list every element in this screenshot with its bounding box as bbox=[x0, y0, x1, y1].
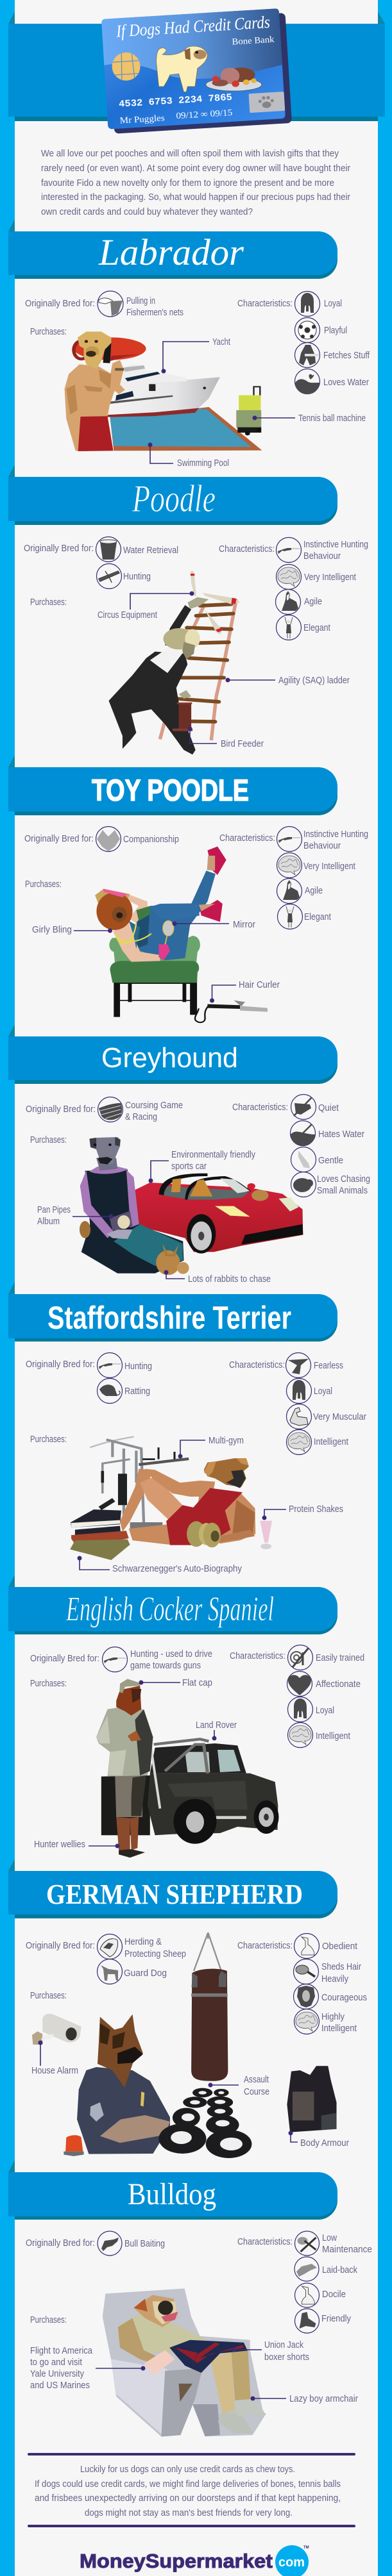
characteristics: Instinctive Hunting bbox=[303, 539, 368, 550]
characteristics bbox=[219, 827, 368, 929]
characteristics: Loyal bbox=[324, 298, 342, 309]
banner: german shepherd bbox=[8, 1859, 337, 1918]
originally bred for: Water Retrieval bbox=[123, 545, 178, 556]
characteristics: Characteristics: bbox=[219, 544, 275, 554]
characteristics: Intelligent bbox=[321, 2023, 357, 2034]
curly poodle head bbox=[95, 889, 133, 930]
tennis ball machine bbox=[236, 386, 261, 435]
banner: toy poodle bbox=[8, 755, 337, 815]
characteristics: Characteristics: bbox=[230, 1650, 285, 1661]
callout: flat cap bbox=[139, 1677, 212, 1688]
callout: flight to america: Flight to America bbox=[30, 2345, 93, 2356]
characteristics: Agile bbox=[304, 596, 322, 607]
callout: circus equipment bbox=[98, 591, 194, 620]
originally bred for: Originally Bred for: bbox=[26, 1104, 96, 1115]
banner: poodle: Poodle bbox=[132, 478, 216, 520]
characteristics: Characteristics: bbox=[229, 1359, 285, 1370]
originally bred for: Originally Bred for: bbox=[24, 833, 94, 844]
section: bulldog bbox=[8, 2160, 372, 2437]
characteristics: Friendly bbox=[321, 2313, 351, 2324]
section: poodle bbox=[8, 465, 368, 754]
green armchair bbox=[109, 936, 200, 1017]
callout: assault course bbox=[208, 2074, 269, 2097]
originally bred for bbox=[25, 291, 183, 318]
originally bred for bbox=[26, 1934, 186, 1984]
banner: bulldog bbox=[8, 2160, 337, 2220]
callout: autobiography: Schwarzenegger's Auto-Biography bbox=[112, 1563, 242, 1574]
banner: staffordshire terrier: Staffordshire Terrier bbox=[47, 1300, 291, 1336]
callout: lazy boy armchair bbox=[250, 2393, 358, 2404]
characteristics: Intelligent bbox=[314, 1436, 349, 1447]
bulldog body bbox=[117, 2314, 266, 2434]
lazy boy armchair bbox=[103, 2288, 266, 2437]
tyres bbox=[158, 2088, 251, 2158]
callout: bird feeder bbox=[187, 727, 264, 749]
callout: assault course: Course bbox=[244, 2086, 269, 2097]
logo: MoneySupermarket.com: TM bbox=[303, 2546, 309, 2550]
characteristics: Quiet bbox=[318, 1102, 339, 1113]
protein shake bbox=[260, 1521, 272, 1549]
callout: body armour bbox=[289, 2131, 349, 2148]
characteristics: Playful bbox=[324, 325, 347, 336]
characteristics: Fetches Stuff bbox=[323, 350, 370, 361]
heels bbox=[199, 847, 226, 922]
characteristics: Characteristics: bbox=[237, 1940, 293, 1951]
hand mirror bbox=[158, 920, 174, 960]
section: labrador bbox=[8, 219, 370, 469]
banner: english cocker spaniel: English Cocker Spaniel bbox=[65, 1590, 274, 1628]
chip bbox=[111, 51, 141, 81]
purchases label: Purchases: bbox=[30, 1678, 67, 1689]
callout: rabbits bbox=[164, 1270, 271, 1284]
callout: pan pipes album: Album bbox=[37, 1216, 60, 1227]
logo: MoneySupermarket.com: MoneySupermarket bbox=[80, 2550, 273, 2572]
jeans and legs bbox=[133, 870, 216, 960]
characteristics: Loves Water bbox=[323, 377, 369, 388]
intro text block: We all love our pet pooches and will often spoil them with lavish gifts that they bbox=[41, 148, 339, 159]
intro text block: interested in the packaging. So, what would happen if our precious pups had their bbox=[41, 192, 350, 203]
banner: german shepherd: GERMAN SHEPHERD bbox=[46, 1879, 303, 1910]
section: greyhound bbox=[8, 1024, 370, 1284]
characteristics bbox=[237, 1933, 367, 2034]
callout: tennis ball machine: Tennis ball machine bbox=[298, 413, 366, 424]
originally bred for bbox=[24, 827, 179, 851]
illustration: poodle in tuxedo with ladder, pins, feeder bbox=[109, 570, 240, 754]
characteristics: Small Animals bbox=[317, 1185, 368, 1196]
originally bred for bbox=[24, 537, 178, 588]
originally bred for: Pulling in bbox=[126, 295, 155, 306]
originally bred for: Originally Bred for: bbox=[26, 1359, 95, 1370]
originally bred for bbox=[26, 2231, 165, 2256]
callout: tennis ball machine bbox=[253, 413, 366, 424]
originally bred for: Bull Baiting bbox=[124, 2238, 165, 2249]
banner: staffordshire terrier bbox=[8, 1282, 337, 1342]
shotgun bbox=[149, 1733, 160, 1809]
card dates: 09/12 ∞ 09/15 bbox=[176, 108, 233, 121]
intro text block: own credit cards and could buy whatever they wanted? bbox=[41, 206, 253, 217]
purchases label: Purchases: bbox=[25, 879, 62, 890]
pug and roast dinner bbox=[157, 46, 262, 92]
callout: hunter wellies: Hunter wellies bbox=[34, 1839, 85, 1850]
callout: girly bling: Girly Bling bbox=[32, 924, 72, 935]
callout: swimming pool: Swimming Pool bbox=[177, 458, 229, 469]
characteristics: Behaviour bbox=[303, 840, 341, 851]
purchases label: Purchases: bbox=[30, 1434, 67, 1445]
characteristics: Gentle bbox=[318, 1155, 343, 1166]
callout: hair curler bbox=[210, 979, 280, 1002]
callout: sports car: Environmentally friendly bbox=[171, 1149, 255, 1160]
callout: union jack boxers: Union Jack bbox=[264, 2339, 303, 2350]
purchases label: Purchases: bbox=[30, 326, 67, 337]
multi-gym bbox=[90, 1437, 189, 1525]
callout: mirror: Mirror bbox=[233, 919, 255, 930]
characteristics: Elegant bbox=[303, 622, 331, 633]
land rover bbox=[101, 1739, 279, 1844]
characteristics: Behaviour bbox=[303, 551, 341, 561]
characteristics: Loyal bbox=[316, 1705, 334, 1716]
characteristics: Affectionate bbox=[316, 1679, 361, 1690]
characteristics: Very Intelligent bbox=[304, 572, 357, 583]
callout: flight to america bbox=[30, 2345, 145, 2391]
intro text block: favourite Fido a new novelty only for them to ignore the present and be more bbox=[41, 178, 334, 188]
callout: union jack boxers bbox=[231, 2339, 309, 2363]
illustration: lifeguard labrador, yacht, pool, tennis machine bbox=[65, 331, 262, 451]
callout: flight to america: to go and visit bbox=[30, 2357, 83, 2368]
illustration: bulldog in recliner bbox=[103, 2288, 266, 2437]
characteristics bbox=[237, 291, 370, 394]
characteristics bbox=[232, 1095, 370, 1197]
banner: greyhound bbox=[8, 1024, 337, 1084]
closing text block: dogs might not stay as man's best friends for very long. bbox=[85, 2507, 293, 2518]
banner: poodle bbox=[8, 465, 337, 525]
characteristics: Obedient bbox=[322, 1941, 358, 1952]
characteristics: Loyal bbox=[314, 1386, 332, 1397]
banner: toy poodle: TOY POODLE bbox=[92, 773, 249, 807]
section: german shepherd bbox=[8, 1859, 367, 2158]
tuxedo body bbox=[109, 597, 209, 754]
agility ladder bbox=[160, 599, 236, 740]
originally bred for: Fishermen's nets bbox=[126, 307, 183, 318]
banner: bulldog: Bulldog bbox=[128, 2177, 216, 2211]
intro text block bbox=[41, 148, 350, 217]
siren bbox=[64, 2135, 84, 2156]
card number: 4532 6753 2234 7865 bbox=[119, 92, 232, 110]
callout: yacht bbox=[162, 337, 231, 373]
callout: multi-gym bbox=[178, 1435, 244, 1459]
illustration: staffordshire with multi-gym, books, shake bbox=[70, 1437, 272, 1560]
bank name: Bone Bank bbox=[232, 35, 275, 47]
characteristics bbox=[219, 537, 368, 640]
section: toy poodle bbox=[8, 755, 368, 1022]
callout: house alarm: House Alarm bbox=[31, 2065, 78, 2076]
lifeguard body bbox=[65, 360, 125, 451]
card title: If Dogs Had Credit Cards bbox=[115, 12, 271, 41]
callout: body armour: Body Armour bbox=[300, 2138, 349, 2148]
callout: rabbits: Lots of rabbits to chase bbox=[188, 1274, 271, 1284]
originally bred for: Protecting Sheep bbox=[124, 1949, 186, 1959]
closing text block bbox=[28, 2453, 355, 2527]
union jack shorts bbox=[169, 2340, 248, 2373]
callout: sports car: sports car bbox=[171, 1161, 207, 1172]
greyhound in dress bbox=[80, 1137, 183, 1274]
originally bred for: Originally Bred for: bbox=[26, 1940, 95, 1951]
necklaces bbox=[115, 923, 151, 943]
originally bred for: Coursing Game bbox=[125, 1100, 183, 1111]
purchases label: Purchases: bbox=[30, 1990, 67, 2001]
skin and shirt bbox=[113, 893, 160, 962]
characteristics bbox=[229, 1352, 366, 1455]
callout: protein shakes: Protein Shakes bbox=[289, 1504, 343, 1515]
characteristics: Courageous bbox=[321, 1992, 367, 2003]
characteristics: Low bbox=[322, 2232, 337, 2243]
illustration: greyhound with sports car and rabbits bbox=[80, 1137, 303, 1275]
callout: agility ladder bbox=[226, 675, 350, 686]
originally bred for bbox=[26, 1352, 152, 1404]
callout: mirror bbox=[172, 919, 255, 930]
characteristics: Docile bbox=[322, 2289, 346, 2300]
callout: girly bling bbox=[32, 924, 112, 935]
callout: bird feeder: Bird Feeder bbox=[221, 738, 264, 749]
characteristics: Heavily bbox=[321, 1974, 348, 1984]
characteristics: Laid-back bbox=[322, 2264, 357, 2275]
dumbbell bbox=[187, 1521, 221, 1547]
callout: union jack boxers: boxer shorts bbox=[264, 2352, 309, 2363]
callout: hair curler: Hair Curler bbox=[239, 979, 280, 990]
originally bred for: Originally Bred for: bbox=[25, 298, 95, 309]
originally bred for: Hunting - used to drive bbox=[130, 1649, 212, 1659]
closing text block: Luckily for us dogs can only use credit cards as chew toys. bbox=[80, 2464, 295, 2475]
bird feeder bbox=[173, 702, 192, 731]
banner: english cocker spaniel bbox=[8, 1575, 337, 1634]
originally bred for: game towards guns bbox=[130, 1660, 201, 1671]
callout: yacht: Yacht bbox=[212, 337, 231, 347]
characteristics bbox=[230, 1645, 364, 1747]
originally bred for: Originally Bred for: bbox=[26, 2238, 95, 2248]
swimming pool bbox=[110, 407, 262, 451]
cctv camera bbox=[32, 2014, 81, 2045]
muscular body bbox=[120, 1469, 255, 1545]
terrier head bbox=[204, 1458, 249, 1488]
originally bred for: Guard Dog bbox=[124, 1968, 167, 1979]
hair curler bbox=[195, 1001, 268, 1022]
signature panel with paw bbox=[249, 92, 285, 113]
illustration: cocker spaniel with land rover bbox=[96, 1679, 279, 1857]
cocker spaniel in tweed bbox=[96, 1679, 153, 1857]
banner: labrador: Labrador bbox=[98, 231, 244, 273]
boarding ticket bbox=[144, 2350, 175, 2375]
characteristics: Characteristics: bbox=[232, 1102, 288, 1113]
originally bred for bbox=[30, 1647, 212, 1672]
callout: sports car bbox=[149, 1149, 255, 1183]
body armour bbox=[287, 2066, 337, 2132]
shepherd in uniform bbox=[77, 2015, 170, 2154]
banner: labrador bbox=[8, 219, 337, 279]
originally bred for: Hunting bbox=[123, 571, 151, 582]
juggling pins bbox=[191, 570, 240, 635]
characteristics: Hates Water bbox=[318, 1129, 364, 1140]
section: staffordshire terrier bbox=[8, 1282, 366, 1574]
callout: house alarm bbox=[31, 2041, 78, 2076]
illustration: toy poodle lounging on armchair bbox=[95, 847, 268, 1022]
punch bag bbox=[191, 1932, 228, 2081]
bulldog head bbox=[133, 2295, 178, 2327]
originally bred for: Hunting bbox=[124, 1361, 152, 1372]
closing text block: If dogs could use credit cards, we might find large deliveries of bones, tennis balls bbox=[35, 2479, 341, 2489]
rescue float bbox=[74, 337, 146, 363]
labrador head bbox=[78, 331, 111, 369]
characteristics: Characteristics: bbox=[237, 2236, 293, 2247]
callout: flight to america: and US Marines bbox=[30, 2380, 90, 2391]
characteristics: Highly bbox=[321, 2011, 345, 2022]
book stack bbox=[70, 1509, 130, 1560]
logo: MoneySupermarket.com: com bbox=[278, 2555, 305, 2570]
callout: flight to america: Yale University bbox=[30, 2368, 84, 2379]
callout: protein shakes bbox=[262, 1504, 343, 1520]
originally bred for: & Racing bbox=[125, 1111, 157, 1122]
originally bred for bbox=[26, 1097, 183, 1122]
rabbits bbox=[80, 1190, 269, 1275]
callout: multi-gym: Multi-gym bbox=[209, 1435, 244, 1446]
credit card title graphic bbox=[101, 8, 292, 134]
callout: agility ladder: Agility (SAQ) ladder bbox=[278, 675, 350, 686]
characteristics: Fearless bbox=[314, 1360, 343, 1371]
callout: land rover bbox=[196, 1720, 237, 1741]
banner: greyhound: Greyhound bbox=[101, 1042, 238, 1074]
characteristics: Sheds Hair bbox=[321, 1961, 361, 1972]
originally bred for: Herding & bbox=[124, 1936, 162, 1947]
callout: autobiography bbox=[77, 1556, 242, 1574]
purchases label: Purchases: bbox=[30, 2314, 67, 2325]
intro text block: rarely need (or even want). At some point every dog owner will have bought their bbox=[41, 163, 350, 174]
logo: MoneySupermarket.com bbox=[80, 2545, 309, 2576]
characteristics: Characteristics: bbox=[219, 833, 275, 843]
purchases label: Purchases: bbox=[30, 1134, 67, 1145]
illustration: german shepherd officer and gear bbox=[32, 1932, 337, 2158]
characteristics bbox=[237, 2231, 372, 2333]
originally bred for: Originally Bred for: bbox=[30, 1653, 99, 1664]
characteristics: Elegant bbox=[304, 911, 332, 922]
originally bred for: Ratting bbox=[124, 1386, 150, 1397]
callout: flat cap: Flat cap bbox=[182, 1677, 212, 1688]
characteristics: Agile bbox=[305, 885, 323, 896]
callout: lazy boy armchair: Lazy boy armchair bbox=[289, 2393, 358, 2404]
characteristics: Very Intelligent bbox=[303, 861, 356, 872]
characteristics: Maintenance bbox=[322, 2244, 372, 2255]
yacht bbox=[108, 364, 220, 417]
purchases label: Purchases: bbox=[30, 597, 67, 608]
callout: pan pipes album bbox=[37, 1204, 113, 1227]
callout: circus equipment: Circus Equipment bbox=[98, 610, 158, 620]
originally bred for: Originally Bred for: bbox=[24, 543, 94, 554]
characteristics: Loves Chasing bbox=[317, 1174, 370, 1184]
originally bred for: Companionship bbox=[123, 834, 179, 845]
callout: pan pipes album: Pan Pipes bbox=[37, 1204, 71, 1215]
header ribbon bbox=[8, 12, 385, 121]
characteristics: Characteristics: bbox=[237, 298, 293, 309]
characteristics: Instinctive Hunting bbox=[303, 829, 368, 840]
callout: land rover: Land Rover bbox=[196, 1720, 237, 1731]
card holder: Mr Puggles bbox=[119, 113, 165, 126]
sports car bbox=[124, 1174, 303, 1254]
section: english cocker spaniel bbox=[8, 1575, 364, 1857]
callout: swimming pool bbox=[148, 442, 229, 469]
closing text block: and frisbees unexpectedly arriving on our doorsteps and if that kept happening, bbox=[35, 2493, 341, 2504]
callout: assault course: Assault bbox=[244, 2074, 269, 2085]
characteristics: Very Muscular bbox=[313, 1411, 366, 1422]
characteristics: Easily trained bbox=[316, 1652, 364, 1663]
characteristics: Intelligent bbox=[316, 1731, 351, 1741]
